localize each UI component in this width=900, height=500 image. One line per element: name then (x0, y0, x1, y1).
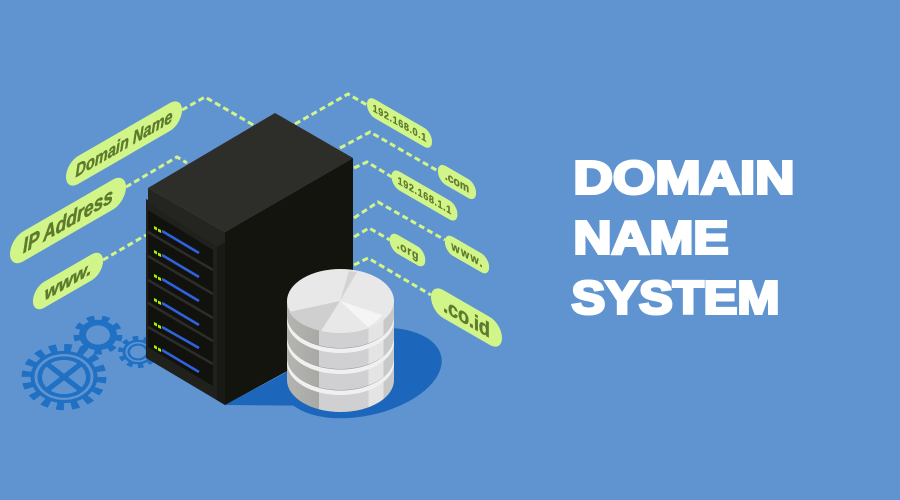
disc top wedges (289, 271, 382, 331)
icon: small gear (122, 339, 154, 365)
label: 192.168.0.1 (367, 95, 432, 151)
icon: gears (27, 319, 154, 406)
dashed connectors (103, 94, 445, 295)
server tower (146, 113, 353, 405)
server front frame (146, 199, 225, 405)
icon: large gear (27, 348, 101, 406)
label: www. right: www. (451, 238, 483, 271)
disc 3 (287, 320, 394, 390)
label: www. right (445, 232, 489, 277)
title line: NAME: NAME (574, 212, 728, 264)
disc 2 (287, 300, 394, 369)
label: www. left: www. (45, 257, 91, 305)
label: .co.id (431, 283, 502, 352)
label: www. left (33, 248, 103, 314)
label: .org (390, 230, 425, 270)
label: IP Address (10, 172, 126, 269)
label: .com (438, 162, 476, 202)
label: .com: .com (445, 168, 469, 196)
label: 192.168.1.1: 192.168.1.1 (398, 175, 451, 218)
label: IP Address: IP Address (23, 183, 113, 259)
server right face (225, 158, 353, 405)
title line: SYSTEM: SYSTEM (572, 272, 780, 324)
label: .org: .org (397, 237, 418, 263)
server front panel (148, 210, 213, 386)
title (572, 152, 794, 324)
server top face (148, 113, 353, 232)
database cylinder (287, 269, 394, 412)
label: 192.168.1.1 (392, 167, 457, 224)
server front lip (148, 188, 225, 247)
disc 1 (287, 300, 394, 348)
disc 4 (287, 330, 394, 412)
label: Domain Name: Domain Name (76, 105, 172, 182)
shadow under server and database (225, 314, 450, 432)
label: .co.id: .co.id (443, 293, 490, 343)
drive bays (148, 226, 213, 372)
title line: DOMAIN: DOMAIN (574, 152, 794, 204)
icon: medium gear (78, 319, 118, 351)
label: 192.168.0.1: 192.168.0.1 (373, 103, 426, 145)
